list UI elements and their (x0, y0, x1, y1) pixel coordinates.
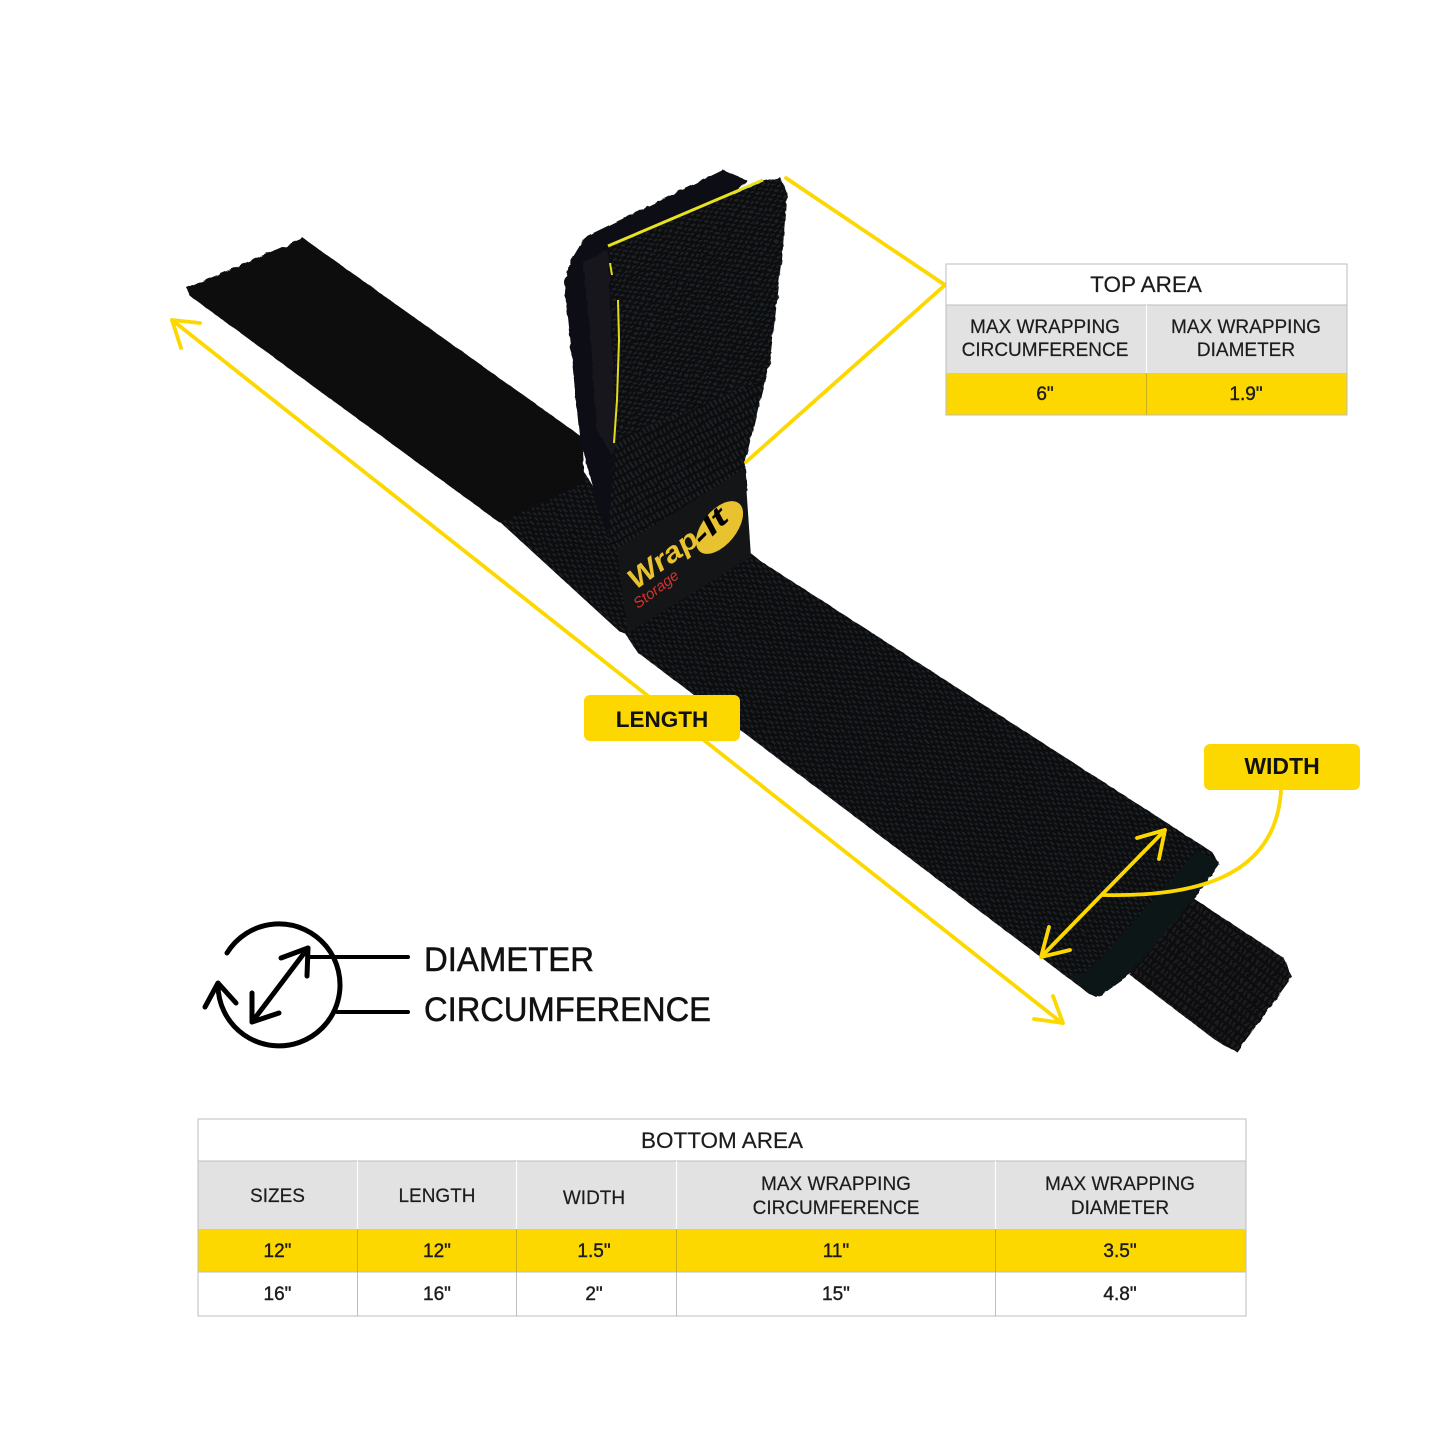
row: 16 inch: 4.8" (1103, 1284, 1137, 1305)
row: 16 inch: 15" (822, 1284, 850, 1305)
header: diameter: MAX WRAPPING (1171, 317, 1321, 338)
curved leader: width (1103, 790, 1281, 895)
table: top area: DIAMETER (1197, 340, 1295, 361)
column headers: CIRCUMFERENCE (753, 1198, 919, 1219)
strap end tab (1130, 898, 1292, 1052)
yellow side edge (610, 263, 619, 443)
table: bottom area (198, 1119, 1246, 1316)
strap bottom section (620, 545, 1219, 998)
value: circumference: 6" (1036, 384, 1054, 405)
column headers: SIZES (250, 1186, 305, 1207)
row: 16 inch: 2" (585, 1284, 603, 1305)
row: 12 inch: 3.5" (1103, 1241, 1137, 1262)
row: 12 inch: 12" (423, 1241, 451, 1262)
row: 16 inch: 16" (264, 1284, 291, 1305)
row: 12 inch: 1.5" (577, 1241, 611, 1262)
table: top area: CIRCUMFERENCE (962, 340, 1128, 361)
logo wordmark: Wrap (621, 523, 704, 595)
arrow: width (1041, 830, 1165, 957)
row: 12 inch (264, 1241, 1137, 1262)
strap folded end edge (1068, 850, 1219, 998)
label: length (584, 695, 740, 741)
value: diameter: 1.9" (1229, 384, 1263, 405)
label: length: LENGTH (616, 707, 708, 732)
arrow: length (172, 320, 1063, 1023)
column headers: MAX WRAPPING (1045, 1174, 1195, 1195)
row: 12 inch: 11" (823, 1241, 849, 1262)
column headers: LENGTH (398, 1186, 476, 1207)
column headers (250, 1174, 1195, 1219)
label: width: WIDTH (1244, 753, 1320, 779)
logo wordmark on oval: -It (685, 501, 736, 551)
strap woven section behind loop (500, 470, 630, 635)
table title: TOP AREA (1090, 272, 1202, 297)
column headers: WIDTH (563, 1188, 625, 1209)
row: 16 inch: 16" (423, 1284, 451, 1305)
logo sub text: Storage (630, 567, 682, 612)
yellow hook backing edge (608, 180, 763, 246)
row: 12 inch: 12" (264, 1241, 291, 1262)
velcro section (187, 238, 585, 523)
leader lines to top area table (746, 178, 945, 462)
loop front layer (608, 177, 787, 570)
label: width (1204, 744, 1360, 790)
loop back layer (564, 170, 747, 540)
column headers: DIAMETER (1071, 1198, 1169, 1219)
legend: circumference: CIRCUMFERENCE (424, 991, 711, 1029)
row: 16 inch (264, 1284, 1137, 1305)
legend: diameter: DIAMETER (424, 941, 594, 979)
icon: diameter and circumference (205, 924, 408, 1046)
table: top area (946, 264, 1347, 415)
column headers: MAX WRAPPING (761, 1174, 911, 1195)
table title: BOTTOM AREA (641, 1128, 803, 1153)
strap label with logo (617, 468, 752, 633)
logo yellow oval (687, 493, 752, 562)
header: circumference: MAX WRAPPING (970, 317, 1120, 338)
loop middle layer (583, 250, 617, 455)
loop stitched lower panel (608, 380, 765, 570)
product photo: black strap (187, 170, 1292, 1052)
